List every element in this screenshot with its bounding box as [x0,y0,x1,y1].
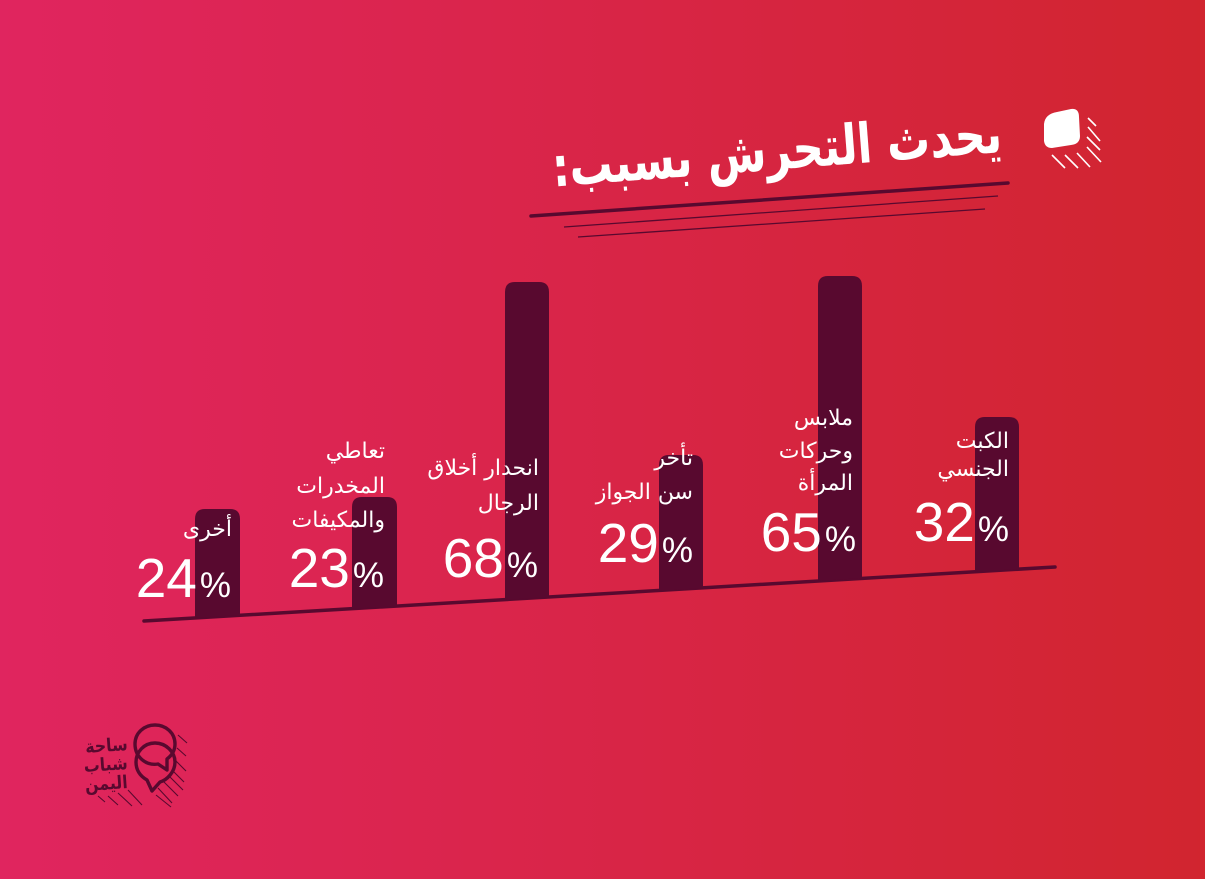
title underlines [531,183,1008,237]
icon: title badge [1044,109,1101,168]
item: late marriage: تأخر [653,442,693,471]
item: women's clothing [761,406,856,563]
item: late marriage: 29% [598,512,693,574]
item: drugs: والمكيفات [292,508,385,533]
item: other: 24% [136,547,231,609]
item: drugs: 23% [289,537,384,599]
chart baseline [144,567,1055,621]
item: women's clothing: 65% [761,501,856,563]
logo [83,725,187,807]
item: sexual repression: الجنسي [937,457,1009,482]
logo: ساحة [84,733,128,757]
item: late marriage [595,442,693,574]
bar: women's clothing [818,276,862,581]
bar: sexual repression [975,417,1019,572]
item: men's morals [427,453,539,589]
item: drugs: تعاطي [326,439,385,464]
logo: شباب [83,752,128,776]
bar: drugs [352,497,397,609]
item: men's morals: انحدار أخلاق [427,453,539,481]
item: sexual repression [914,429,1009,553]
item: men's morals: 68% [443,527,538,589]
item: women's clothing: المرأة [798,468,853,496]
item: other [136,514,232,609]
item: late marriage: سن الجواز [595,480,693,505]
item: sexual repression: 32% [914,491,1009,553]
item: other: أخرى [183,514,232,542]
item: drugs [289,439,385,599]
item: men's morals: الرجال [478,491,539,516]
bar: late marriage [659,455,703,591]
bar: other [195,509,240,618]
bar: men's morals [505,282,549,600]
item: drugs: المخدرات [296,474,385,499]
logo: اليمن [84,771,128,796]
item: women's clothing: ملابس [794,406,853,431]
title: يحدث التحرش بسبب: [550,101,1004,200]
item: women's clothing: وحركات [779,439,853,464]
item: sexual repression: الكبت [956,429,1009,454]
